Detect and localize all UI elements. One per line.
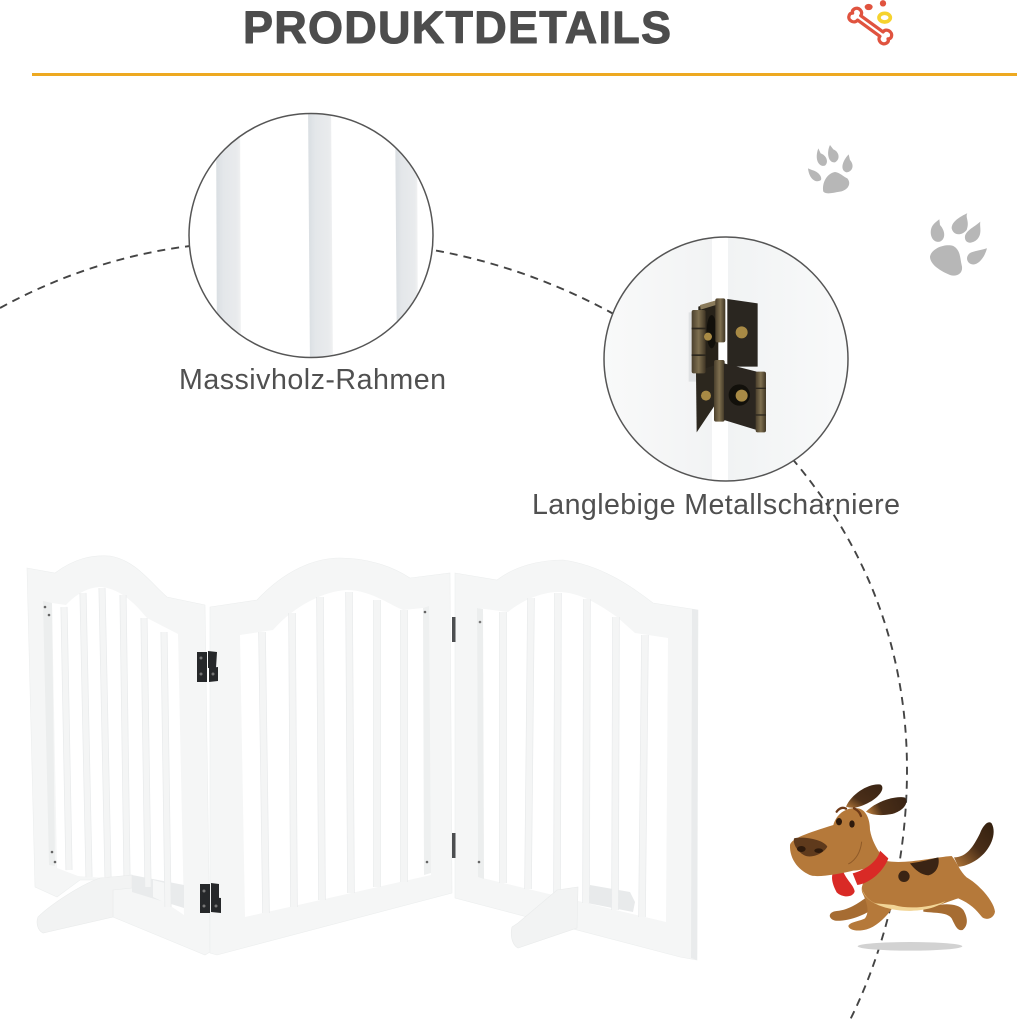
icon: bone and treats <box>847 0 894 46</box>
illustration: running dog <box>790 784 995 951</box>
gate foot: left <box>37 875 132 933</box>
icon: black hinge lower left <box>200 883 221 913</box>
gate foot: right <box>511 887 578 948</box>
icon: small paw print <box>808 145 853 193</box>
panel: solid wood frame detail circle <box>189 100 433 370</box>
icon: black hinge upper left <box>197 651 218 682</box>
label: Massivholz-Rahmen: Massivholz-Rahmen <box>179 364 446 396</box>
header rule <box>32 73 1017 76</box>
gate panel: right <box>455 560 698 960</box>
icon: brass hinge <box>689 298 766 432</box>
label: Langlebige Metallscharniere: Langlebige Metallscharniere <box>532 489 900 521</box>
icon: side hinges right <box>452 617 456 858</box>
title: PRODUKTDETAILS <box>243 2 671 53</box>
gate panel: middle <box>210 558 452 955</box>
icon: large paw print <box>930 213 987 276</box>
white folding gate <box>27 556 698 960</box>
gate panel: left <box>27 556 210 955</box>
panel: metal hinge detail circle <box>600 230 853 490</box>
dashed connector arc <box>0 239 907 1020</box>
